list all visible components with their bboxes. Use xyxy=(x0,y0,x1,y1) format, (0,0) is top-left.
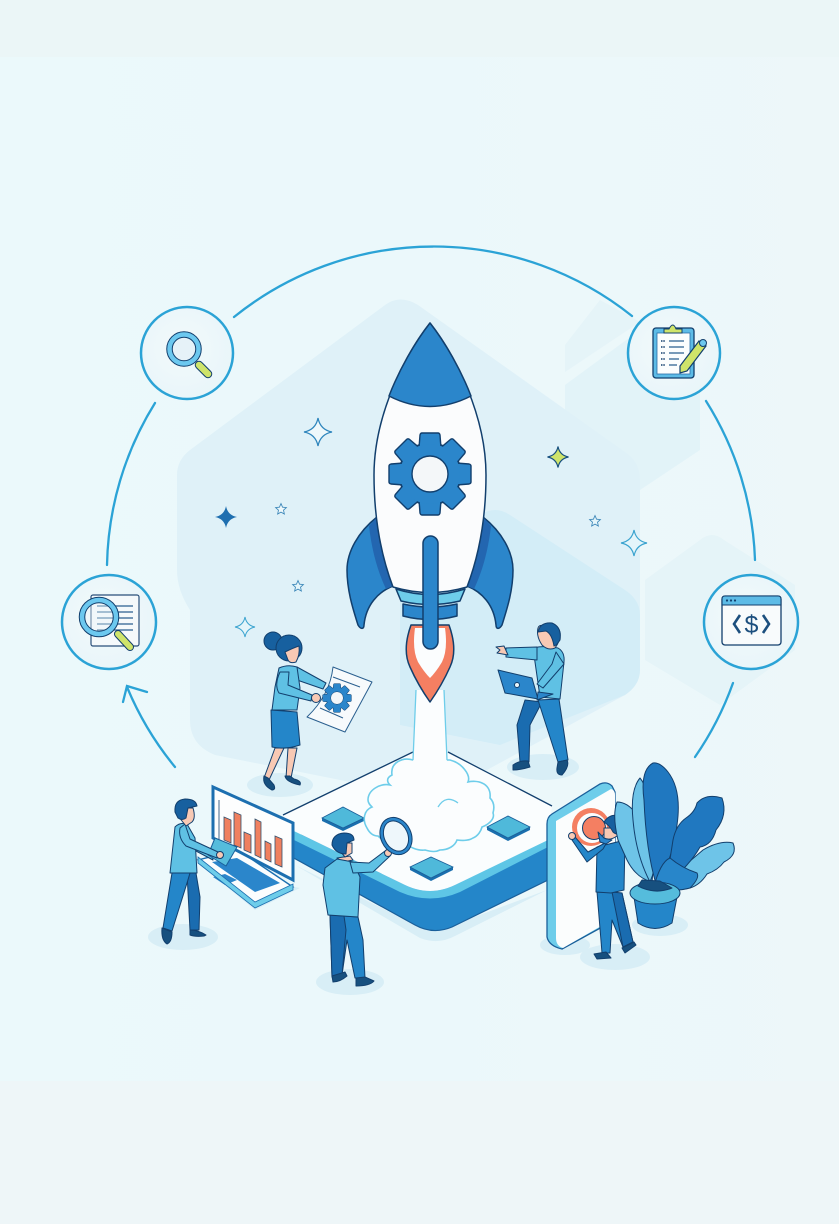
background hexagons xyxy=(177,300,795,795)
rocket gear emblem xyxy=(389,433,471,515)
center dark leaf xyxy=(643,763,678,884)
soft ground shadows xyxy=(148,754,688,995)
icon: magnifier badge xyxy=(141,307,233,399)
rocket nose xyxy=(389,323,471,406)
low dark leaf xyxy=(653,858,698,891)
man pressing button xyxy=(568,815,636,959)
cycle arc segments with arrow xyxy=(107,247,755,767)
platform tile left xyxy=(322,807,364,831)
flower pot xyxy=(630,880,680,928)
magnifying glass xyxy=(376,814,416,858)
rocket body xyxy=(374,323,486,592)
icon: document search badge xyxy=(62,575,156,669)
rocket center fin xyxy=(423,536,438,649)
rocket left fin xyxy=(347,517,393,628)
blueprint sheet xyxy=(307,667,372,732)
laptop with bar chart xyxy=(198,787,293,908)
man with magnifying glass xyxy=(323,814,416,986)
platform tile right xyxy=(487,816,530,841)
phone panel with button xyxy=(547,783,615,949)
rocket right fin xyxy=(467,517,513,628)
potted plant xyxy=(615,763,734,928)
exhaust cloud xyxy=(364,759,494,852)
rocket exhaust plume xyxy=(413,690,447,764)
sparkles and stars xyxy=(215,418,647,637)
platform tile front xyxy=(410,857,453,881)
right dark leaf xyxy=(666,796,724,885)
right light leaf xyxy=(683,842,734,888)
man with open laptop xyxy=(496,623,568,775)
back light leaf xyxy=(615,802,653,882)
icon: clipboard badge xyxy=(628,307,720,399)
man at laptop with tablet xyxy=(162,799,237,944)
icon: code window badge xyxy=(704,575,798,669)
rocket flame xyxy=(406,625,454,702)
icon: code window badge: $ xyxy=(745,611,759,639)
woman holding blueprint xyxy=(264,632,372,790)
launch platform xyxy=(283,752,552,931)
red push button xyxy=(572,808,610,846)
chart bars xyxy=(224,812,282,867)
rocket xyxy=(347,323,513,702)
rocket collar xyxy=(396,589,465,620)
small laptop xyxy=(498,670,553,700)
